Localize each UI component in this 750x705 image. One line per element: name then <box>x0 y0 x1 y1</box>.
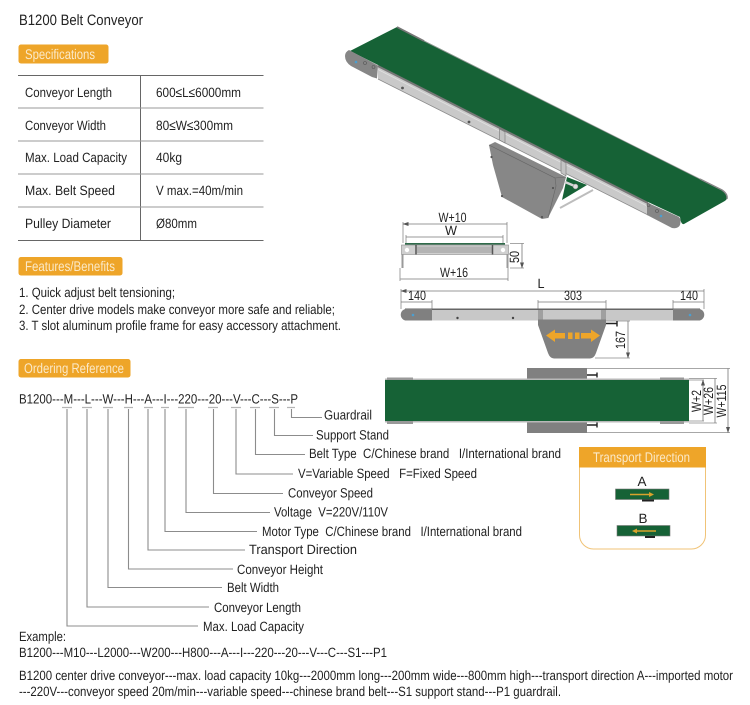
belt <box>350 27 727 224</box>
direction B diagram: B <box>638 511 648 526</box>
chart: ordering code leader lines <box>62 408 561 634</box>
chart: ordering code leader lines: Voltage V=220V/110V <box>274 504 388 520</box>
chart: ordering code leader lines: Conveyor Length <box>214 600 301 615</box>
panel: specifications table <box>18 75 264 240</box>
chart: ordering code leader lines: Conveyor Speed <box>288 486 373 500</box>
text block: benefits list <box>19 285 341 333</box>
heading: features and benefits: Features/Benefits <box>25 258 115 274</box>
title: B1200 Belt Conveyor <box>19 12 143 29</box>
chart: ordering code leader lines: Motor Type C/Chinese brand I/International brand <box>262 524 522 539</box>
silver side rail <box>378 65 648 215</box>
direction A diagram: A <box>638 474 646 489</box>
icon: orange direction arrows <box>546 330 600 342</box>
diagram: cross section with dimensions: W+16 <box>440 265 468 280</box>
diagram: top plan view with dimensions <box>385 368 730 433</box>
chart: ordering code leader lines: Guardrail <box>324 408 372 422</box>
panel: specifications table: Conveyor Length <box>25 85 112 100</box>
panel: specifications table: Ø80mm <box>156 216 197 231</box>
heading: specifications: Specifications <box>25 46 95 62</box>
text block: example <box>19 629 733 699</box>
panel: specifications table: 40kg <box>156 150 182 165</box>
text block: benefits list: 2. Center drive models make conveyor more safe and reliable; <box>19 302 335 317</box>
text block: benefits list: 3. T slot aluminum profile frame for easy accessory attachment. <box>19 318 341 333</box>
panel: specifications table: 80≤W≤300mm <box>156 118 233 133</box>
panel: specifications table: Max. Belt Speed <box>25 183 115 198</box>
diagram: top plan view with dimensions: W+2 <box>689 390 704 412</box>
diagram: side view with dimensions: 167 <box>613 331 628 349</box>
diagram: side view with dimensions: L <box>538 276 545 291</box>
panel: specifications table: Conveyor Width <box>25 118 106 133</box>
rail screws <box>401 87 404 89</box>
diagram: cross section with dimensions: 50 <box>507 251 522 263</box>
panel: specifications table: V max.=40m/min <box>156 183 243 198</box>
panel: specifications table: Pulley Diameter <box>25 216 111 231</box>
chart: ordering code leader lines: Belt Width <box>227 580 279 595</box>
chart: ordering code leader lines: Support Stand <box>316 428 389 442</box>
text block: example: B1200---M10---L2000---W200---H800---A---I---220---20---V---C---S1---P1 <box>19 645 387 660</box>
motor brackets <box>500 129 505 143</box>
left end cap <box>345 50 378 78</box>
text block: example: ---220V---conveyor speed 20m/min---variable speed---chinese brand belt---S1 support stand---P1 guardrail. <box>19 684 561 699</box>
text block: benefits list: 1. Quick adjust belt tensioning; <box>19 285 175 300</box>
panel: specifications table: Max. Load Capacity <box>25 150 127 165</box>
ordering code: B1200---M---L---W---H---A---I---220---20---V---C---S---P <box>19 392 298 406</box>
panel: transport direction: Transport Direction <box>593 449 690 465</box>
panel: transport direction <box>579 447 706 549</box>
text block: example: Example: <box>19 629 66 644</box>
chart: ordering code leader lines: Transport Direction <box>249 542 357 557</box>
diagram: top plan view with dimensions: W+26 <box>701 387 716 415</box>
diagram: side view with dimensions: 140 <box>408 288 426 303</box>
heading: ordering reference: Ordering Reference <box>24 360 124 376</box>
diagram: side view with dimensions: 140 <box>680 288 698 303</box>
chart: ordering code leader lines: V=Variable Speed F=Fixed Speed <box>298 466 477 481</box>
diagram: side view with dimensions <box>401 276 704 358</box>
chart: ordering code leader lines: Max. Load Capacity <box>203 619 304 634</box>
motor housing <box>489 142 566 219</box>
diagram: cross section with dimensions: W+10 <box>438 210 466 225</box>
diagram: top plan view with dimensions: W+115 <box>714 384 729 418</box>
diagram: side view with dimensions: 303 <box>564 288 582 303</box>
illustration: conveyor isometric view <box>345 27 727 228</box>
chart: ordering code leader lines: Conveyor Height <box>237 562 323 577</box>
diagram: cross section with dimensions <box>400 210 524 281</box>
panel: specifications table: 600≤L≤6000mm <box>156 85 241 100</box>
right end cap <box>647 202 681 228</box>
chart: ordering code leader lines: Belt Type C/Chinese brand I/International brand <box>309 446 561 461</box>
diagram: cross section with dimensions: W <box>445 223 457 238</box>
